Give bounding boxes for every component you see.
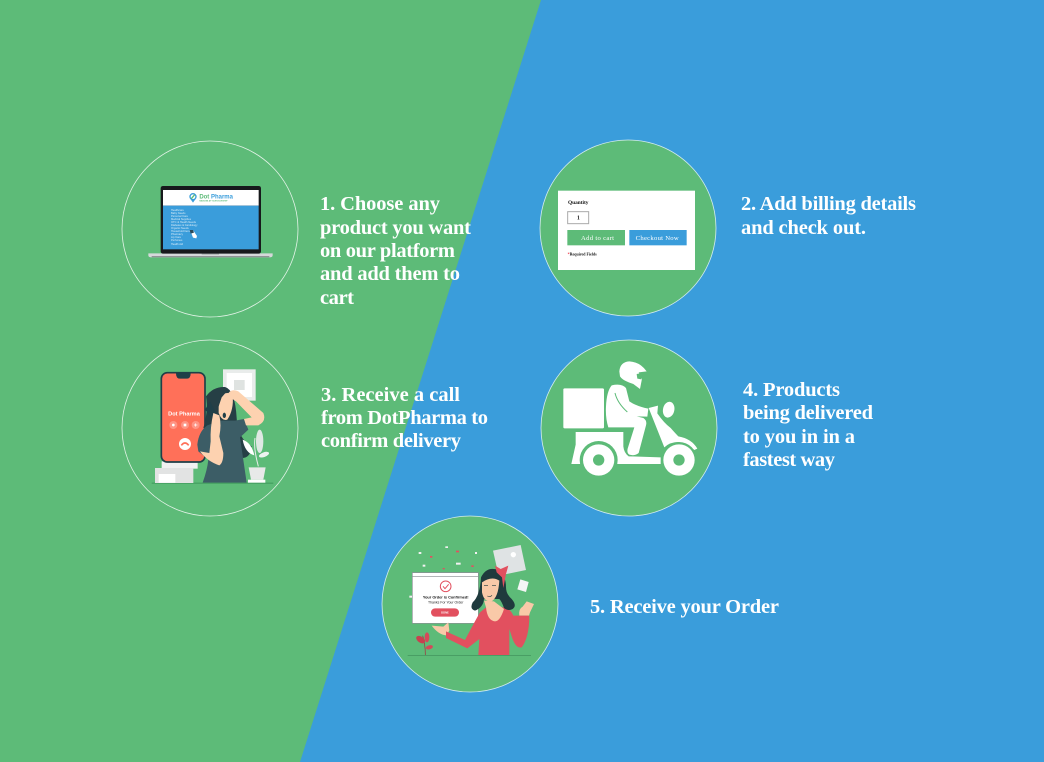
illustration: woman receiving a call: Dot Pharma xyxy=(168,411,201,417)
step 1 text: 1. Choose any xyxy=(320,193,441,215)
step 4 text xyxy=(743,379,874,471)
icon: laptop showing DotPharma site: OTC & Health Needs xyxy=(171,220,197,224)
illustration: woman with order confirmed window: DONE xyxy=(441,611,449,615)
panel: step 3 circle with phone call xyxy=(122,340,298,516)
icon: laptop showing DotPharma site: Household Items xyxy=(171,229,192,233)
illustration: woman with order confirmed window xyxy=(408,545,534,656)
circle fill 4 xyxy=(541,340,717,516)
checkout form card: Add to cart xyxy=(581,235,614,242)
panel: step 4 circle with delivery scooter xyxy=(541,340,717,516)
checkout form card xyxy=(558,191,695,270)
panel: step 1 circle with laptop xyxy=(122,141,298,317)
step 2 text: and check out. xyxy=(741,217,866,239)
step 4 text: to you in in a xyxy=(743,426,855,448)
step 2 text: 2. Add billing details xyxy=(741,193,916,215)
circle outline 1 xyxy=(122,141,298,317)
icon: laptop showing DotPharma site: Lip Care xyxy=(171,235,182,239)
background: green diagonal field xyxy=(0,0,541,762)
step 1 text: on our platform xyxy=(320,240,455,262)
step 4 text: fastest way xyxy=(743,449,836,471)
icon: laptop showing DotPharma site: Perfumes xyxy=(171,238,183,242)
icon: laptop showing DotPharma site: Baby Needs xyxy=(171,211,186,215)
panel: step 2 circle with checkout form xyxy=(540,140,716,316)
icon: laptop showing DotPharma site xyxy=(148,186,273,257)
step 2 text xyxy=(741,193,916,239)
icon: laptop showing DotPharma site: Organic Needs xyxy=(171,226,189,230)
circle fill 5 xyxy=(382,516,558,692)
step 1 text: product you want xyxy=(320,217,471,239)
icon: laptop showing DotPharma site: MEDICINE AT YOUR DOORSTEP xyxy=(199,199,228,202)
illustration: woman with order confirmed window: Thanks For Your Order xyxy=(428,601,464,605)
step 1 text xyxy=(320,193,471,309)
step 4 text: being delivered xyxy=(743,402,874,424)
step 3 text xyxy=(321,384,488,452)
circle fill 2 xyxy=(540,140,716,316)
icon: laptop showing DotPharma site: Medical Supplies xyxy=(171,217,192,221)
icon: laptop showing DotPharma site: Diabetes & Cardiology xyxy=(171,223,198,227)
icon: laptop showing DotPharma site: Pharmacy xyxy=(171,232,184,236)
step 1 text: and add them to xyxy=(320,263,460,285)
icon: laptop showing DotPharma site: Healthcare xyxy=(171,208,184,212)
checkout form card: *Required Fields xyxy=(568,251,597,256)
icon: laptop showing DotPharma site: Dot Pharma xyxy=(199,194,234,200)
illustration: woman with order confirmed window: Your Order is Confirmed! xyxy=(423,596,469,600)
checkout form card: Checkout Now xyxy=(636,235,679,242)
panel: step 5 circle with order confirmation xyxy=(382,516,558,692)
checkout form card: Quantity xyxy=(568,200,589,206)
circle outline 3 xyxy=(122,340,298,516)
icon: laptop showing DotPharma site: Personal Care xyxy=(171,214,189,218)
step 3 text: 3. Receive a call xyxy=(321,384,460,406)
icon: laptop showing DotPharma site: Health Aid xyxy=(171,242,184,246)
step 4 text: 4. Products xyxy=(743,379,840,401)
step 3 text: confirm delivery xyxy=(321,430,462,452)
icon: delivery rider on scooter xyxy=(563,361,697,479)
checkout form card: 1 xyxy=(577,216,580,222)
step 1 text: cart xyxy=(320,287,354,309)
illustration: woman receiving a call xyxy=(152,369,273,484)
step 5 text: 5. Receive your Order xyxy=(590,596,779,618)
step 3 text: from DotPharma to xyxy=(321,407,488,429)
